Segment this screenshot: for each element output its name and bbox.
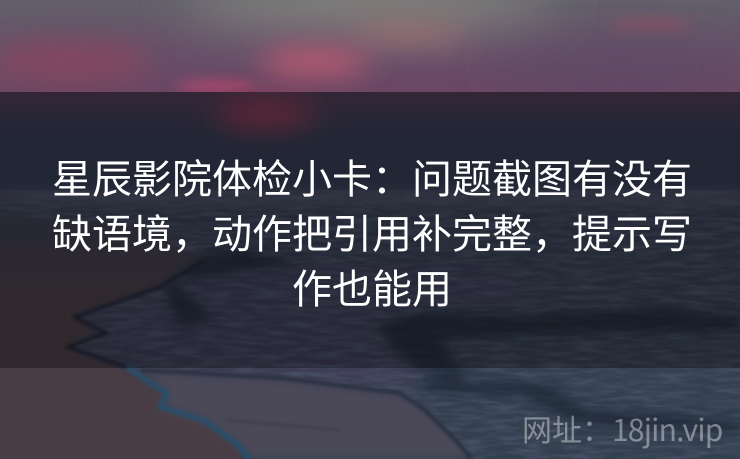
title: 星辰影院体检小卡：问题截图有没有 xyxy=(52,147,692,205)
overlay band xyxy=(0,92,740,368)
foam sheet, lower middle xyxy=(141,370,472,459)
title: 作也能用 xyxy=(292,257,452,315)
foam sheet, upper middle xyxy=(72,262,520,390)
sky xyxy=(0,0,740,92)
wet sand, left xyxy=(0,205,250,459)
shoreline foam edges xyxy=(68,260,472,459)
water ripple texture xyxy=(0,190,740,459)
title: 缺语境，动作把引用补完整，提示写 xyxy=(52,202,692,260)
sea and horizon glow xyxy=(0,92,740,459)
watermark: 网址：18jin.vip xyxy=(522,406,723,450)
dark waves xyxy=(165,250,740,432)
title xyxy=(52,147,692,315)
